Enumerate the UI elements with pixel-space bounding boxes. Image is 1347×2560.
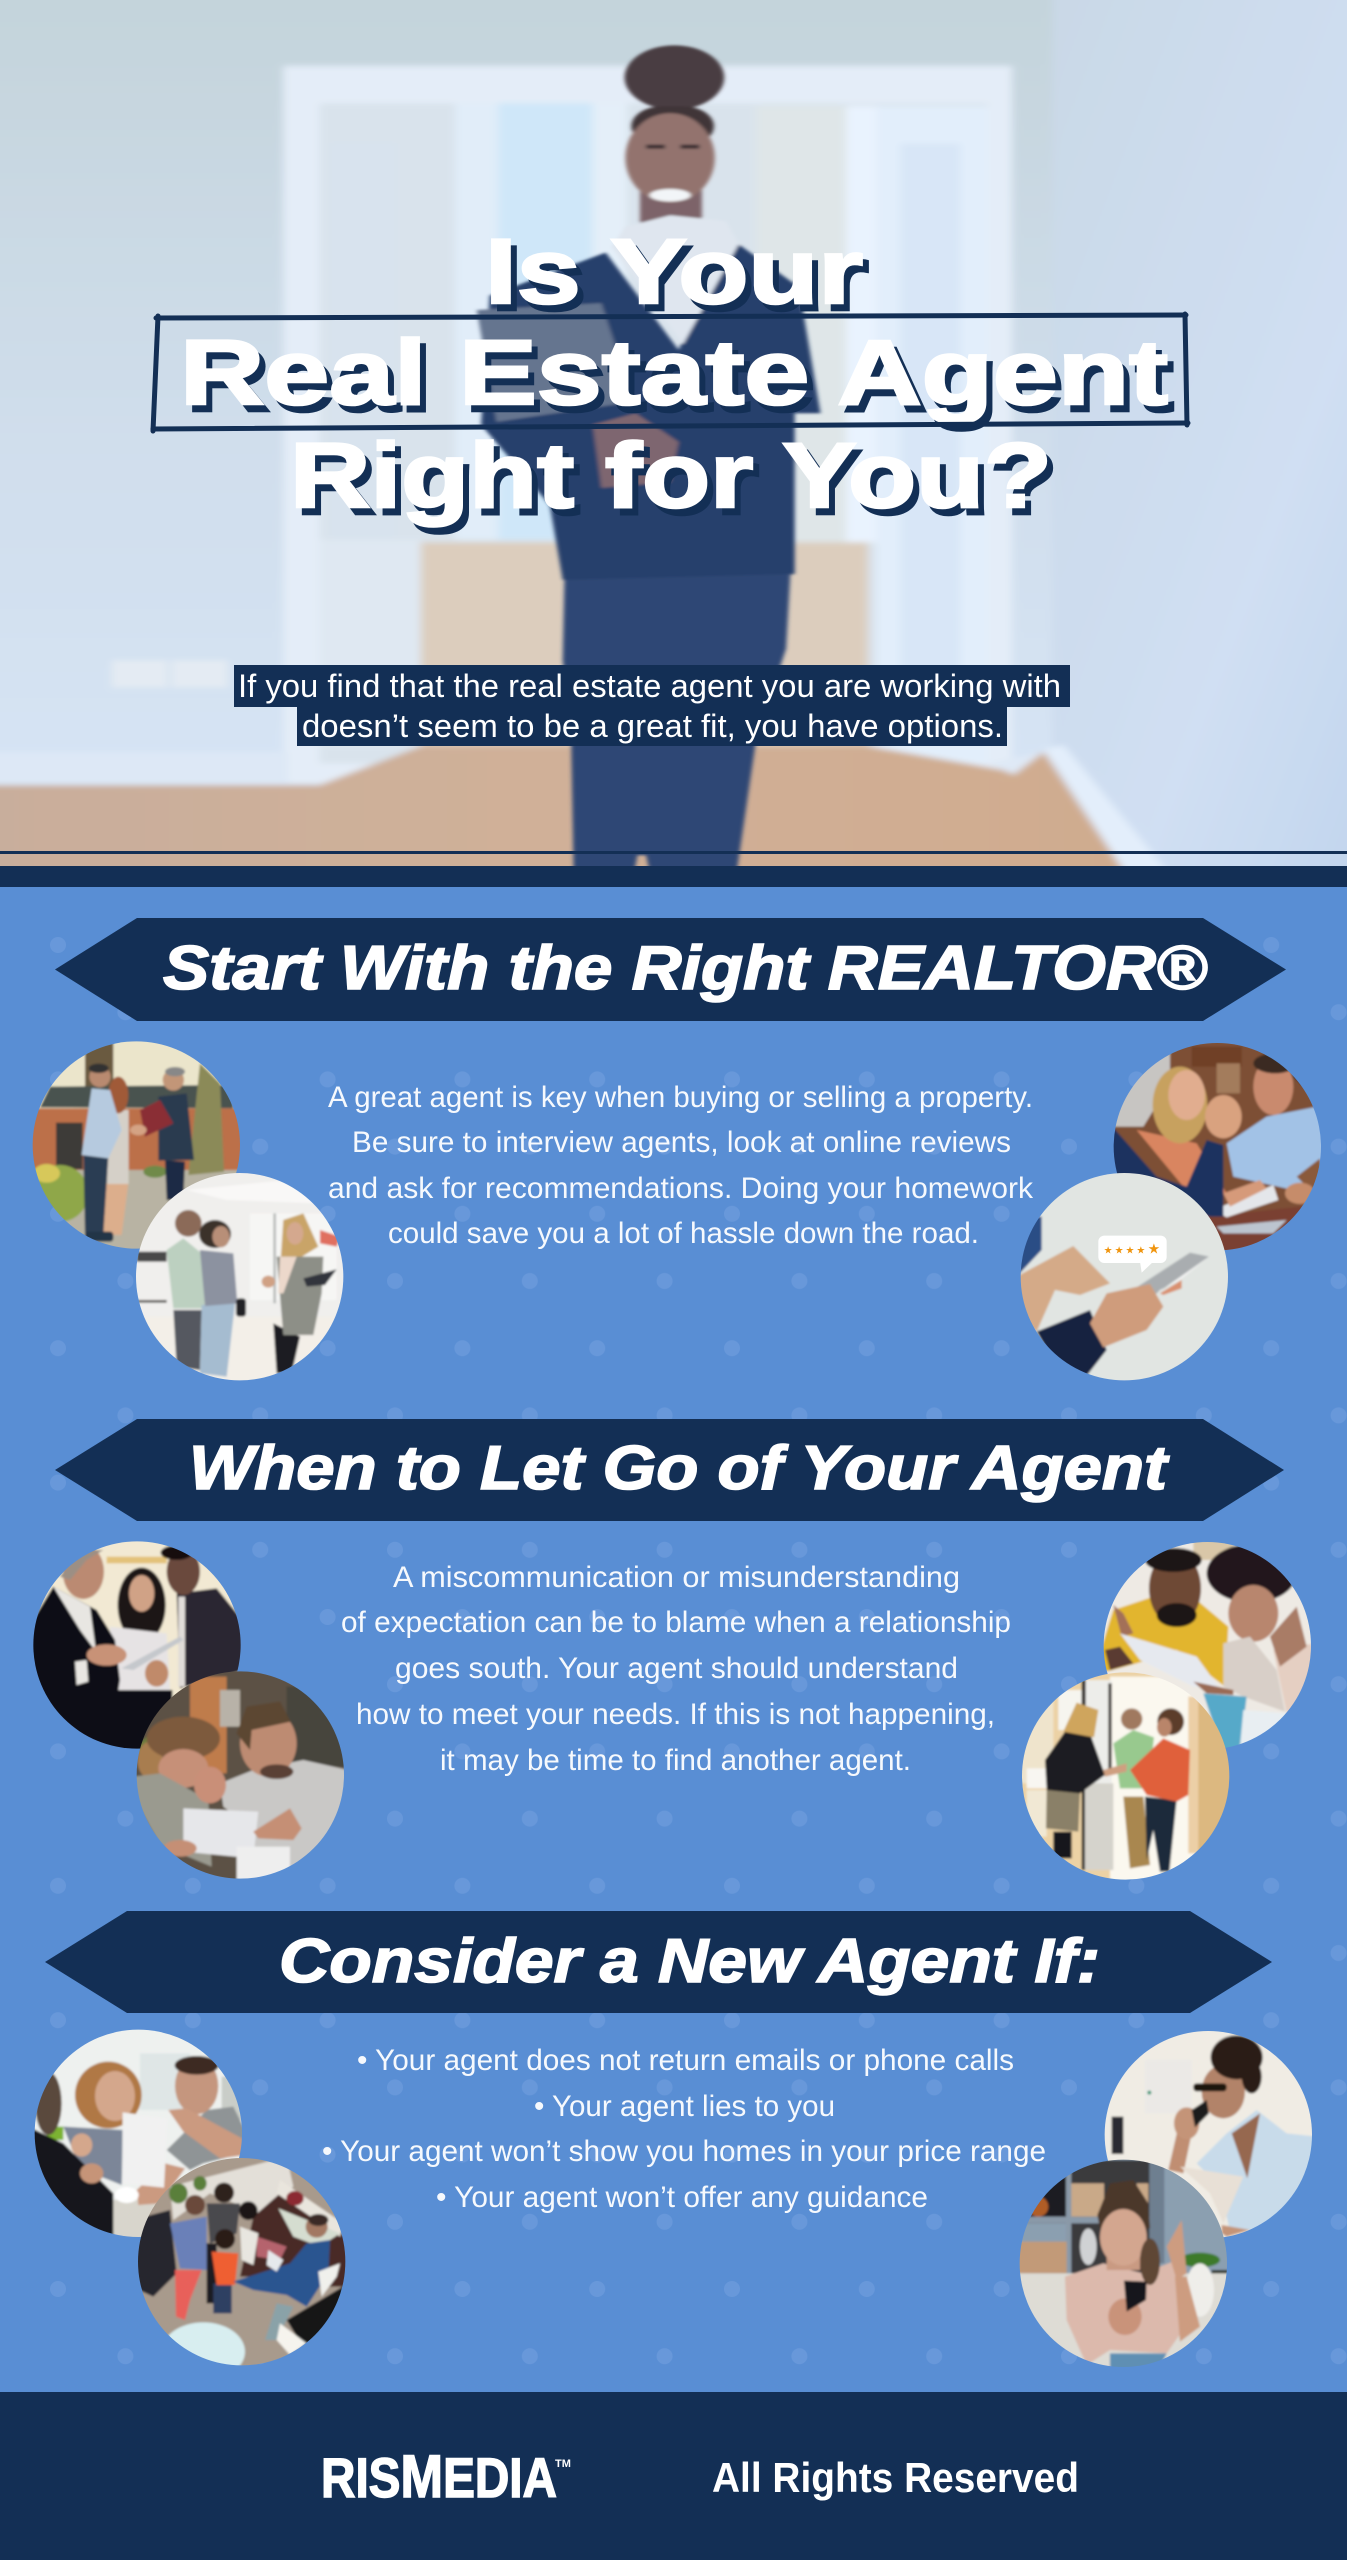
photo: three people reviewing a tablet (33, 1541, 241, 1749)
panel: blue content background with dots (0, 880, 1347, 2400)
text: start with the right realtor: Be sure to interview agents, look at online reviews (352, 1126, 1011, 1159)
text: reasons to consider a new agent: • Your agent won’t offer any guidance (436, 2181, 928, 2214)
text: reasons to consider a new agent: • Your agent won’t show you homes in your price range (322, 2135, 1046, 2168)
photo: frustrated couple with paperwork (1104, 1542, 1311, 1748)
title: Right for You? (290, 425, 1052, 527)
hero photo: agent in empty room (0, 0, 1347, 918)
hero subtitle with navy highlight (234, 665, 1070, 746)
photo: agent showing tablet to family in living room (138, 2158, 346, 2366)
title hand-drawn frame (153, 314, 1188, 431)
banner: consider a new agent if: Consider a New Agent If: (279, 1927, 1100, 1996)
text: reasons to consider a new agent (322, 2044, 1046, 2214)
banner: consider a new agent if (45, 1911, 1272, 2013)
title: Real Estate Agent (180, 322, 1168, 424)
text: start with the right realtor: could save you a lot of hassle down the road. (388, 1217, 979, 1250)
banner: when to let go of your agent (55, 1419, 1284, 1521)
text: when to let go of your agent: how to meet your needs. If this is not happening, (356, 1698, 995, 1731)
title (180, 221, 1168, 527)
photo: stressed couple reading a document (130, 1667, 350, 1883)
hero subtitle with navy highlight: If you find that the real estate agent you are working with (238, 668, 1061, 704)
text: start with the right realtor (328, 1081, 1034, 1250)
banner: start with the right realtor: Start With the Right REALTOR® (163, 934, 1207, 1003)
banner: when to let go of your agent: When to Let Go of Your Agent (189, 1434, 1170, 1503)
logo: RISMedia wordmark: RISMEDIA (321, 2443, 557, 2510)
footer text: all rights reserved: All Rights Reserved (712, 2454, 1079, 2501)
text: start with the right realtor: and ask for recommendations. Doing your homework (328, 1172, 1034, 1205)
photo: hand on phone leaving five star review (1020, 1173, 1228, 1380)
photo: hand on phone leaving five star review: ★ (1148, 1242, 1160, 1258)
banner: start with the right realtor (55, 918, 1286, 1021)
title: Is Your (485, 221, 863, 323)
photo: agent greeting couple at the door (1022, 1672, 1230, 1880)
text: when to let go of your agent (341, 1561, 1011, 1777)
text: start with the right realtor: A great agent is key when buying or selling a property. (328, 1081, 1033, 1114)
text: when to let go of your agent: goes south. Your agent should understand (395, 1652, 958, 1685)
photo: annoyed woman looking at her phone (1020, 2160, 1227, 2367)
footer (0, 2392, 1347, 2560)
text: reasons to consider a new agent: • Your agent does not return emails or phone calls (357, 2044, 1014, 2077)
text: when to let go of your agent: of expectation can be to blame when a relationship (341, 1606, 1011, 1639)
photo: smiling couple meeting with agent (1114, 1043, 1321, 1250)
hero double rule and navy band (0, 851, 1347, 887)
text: when to let go of your agent: A miscommunication or misunderstanding (393, 1561, 960, 1594)
photo: couple shaking hands with agent outside house (32, 1041, 240, 1249)
text: reasons to consider a new agent: • Your agent lies to you (534, 2090, 835, 2123)
text: when to let go of your agent: it may be time to find another agent. (440, 1744, 911, 1777)
photo: couple holding up a contract (34, 2030, 242, 2237)
photo: woman on the phone with glasses (1104, 2031, 1312, 2238)
hero subtitle with navy highlight: doesn’t seem to be a great fit, you have options. (302, 708, 1003, 744)
logo: RISMedia wordmark: TM (555, 2458, 571, 2470)
photo: agent showing home to couple (136, 1173, 344, 1380)
photo: hand on phone leaving five star review: ★★★★ (1104, 1246, 1145, 1257)
